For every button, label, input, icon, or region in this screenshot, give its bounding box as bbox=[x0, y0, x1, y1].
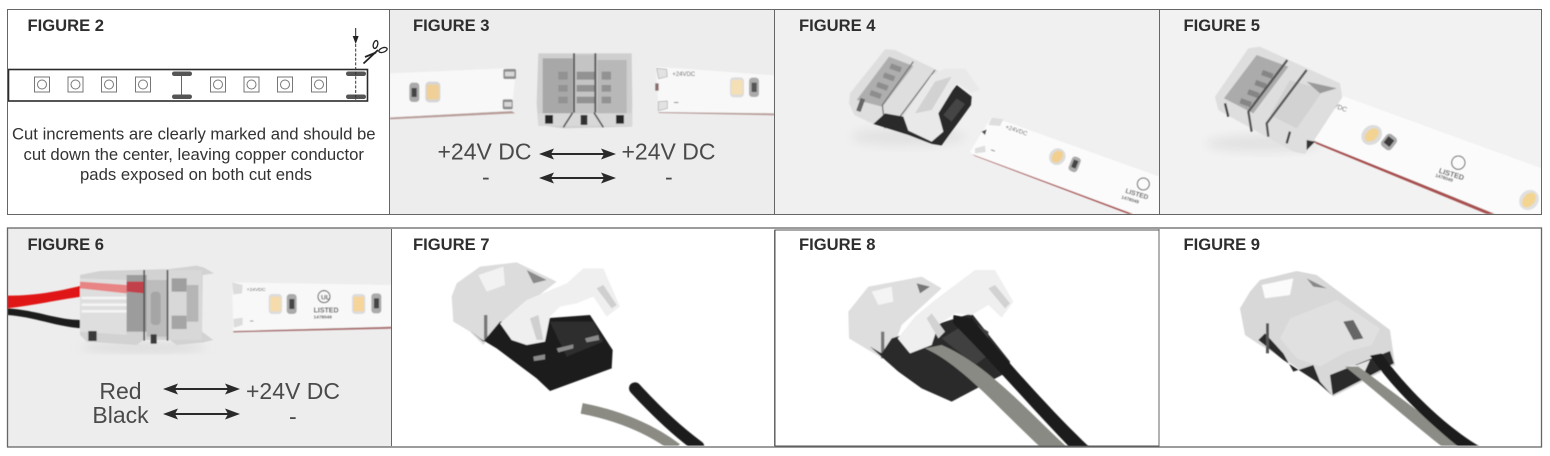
arrow: black link bbox=[163, 408, 240, 420]
heading: figure 8: FIGURE 8 bbox=[799, 235, 876, 254]
icon: scissors bbox=[364, 40, 388, 64]
panel: figure 8 bbox=[775, 230, 1159, 448]
label: red wire: Red bbox=[99, 378, 142, 404]
text: cut instructions: cut down the center, leaving copper conductor bbox=[24, 145, 364, 164]
photo: closed connector on strip bbox=[1207, 47, 1543, 214]
label: negative: - bbox=[289, 404, 297, 430]
text: cut instructions: pads exposed on both cut ends bbox=[80, 165, 312, 184]
photo: open connector and strip: +24VDC bbox=[1004, 125, 1028, 138]
photo: closed connector on strip: 1478049 bbox=[1435, 173, 1454, 183]
photo: connector and cut strip ends: +24VDC bbox=[672, 72, 696, 78]
panel: figure 7 bbox=[414, 238, 705, 446]
heading: figure 3: FIGURE 3 bbox=[413, 16, 490, 35]
panel: figure 4 bbox=[775, 10, 1160, 214]
label: right negative: - bbox=[665, 164, 673, 190]
panel: figure 9 bbox=[1184, 238, 1480, 446]
heading: figure 7: FIGURE 7 bbox=[413, 235, 490, 254]
photo: open connector and strip bbox=[849, 49, 1159, 214]
photo: wired connector and strip: UL bbox=[321, 294, 330, 301]
panel: figure 3 bbox=[390, 10, 774, 214]
heading: figure 9: FIGURE 9 bbox=[1184, 235, 1260, 254]
diagram: LED strip with cut marks bbox=[8, 70, 368, 101]
panel: figure 5 bbox=[1160, 10, 1543, 214]
arrow: positive link bbox=[539, 148, 616, 160]
label: positive: +24V DC bbox=[246, 378, 340, 404]
photo: wired connector and strip: 1478049 bbox=[314, 315, 332, 320]
photo: wired connector and strip bbox=[7, 266, 392, 352]
arrow: cut line bbox=[353, 28, 359, 100]
arrow: negative link bbox=[539, 172, 616, 184]
text: cut instructions: Cut increments are clearly marked and should be bbox=[12, 124, 376, 144]
panel: figure 6 bbox=[7, 228, 392, 447]
heading: figure 4: FIGURE 4 bbox=[799, 16, 876, 35]
photo: open connector with separate wires bbox=[452, 262, 698, 448]
photo: wires inserted into open connector bbox=[848, 270, 1090, 448]
photo: wired connector and strip: LISTED bbox=[314, 307, 339, 314]
arrow: red link bbox=[163, 384, 240, 394]
panel: figure 2 bbox=[8, 10, 390, 214]
label: black wire: Black bbox=[92, 402, 149, 428]
photo: closed connector with wires bbox=[1240, 271, 1480, 448]
label: left polarity: +24V DC bbox=[438, 138, 531, 164]
label: right polarity: +24V DC bbox=[622, 138, 715, 164]
photo: closed connector on strip: LISTED bbox=[1438, 166, 1465, 182]
photo: connector and cut strip ends bbox=[390, 53, 774, 128]
heading: figure 6: FIGURE 6 bbox=[28, 235, 104, 254]
heading: figure 5: FIGURE 5 bbox=[1184, 16, 1260, 35]
photo: open connector and strip: 1478049 bbox=[1121, 195, 1140, 205]
photo: open connector and strip: LISTED bbox=[1124, 188, 1149, 202]
photo: closed connector on strip: 4VDC bbox=[1329, 101, 1348, 114]
label: left negative: - bbox=[482, 164, 490, 190]
heading: figure 2: FIGURE 2 bbox=[28, 16, 104, 35]
photo: wired connector and strip: +24VDC bbox=[247, 287, 266, 293]
